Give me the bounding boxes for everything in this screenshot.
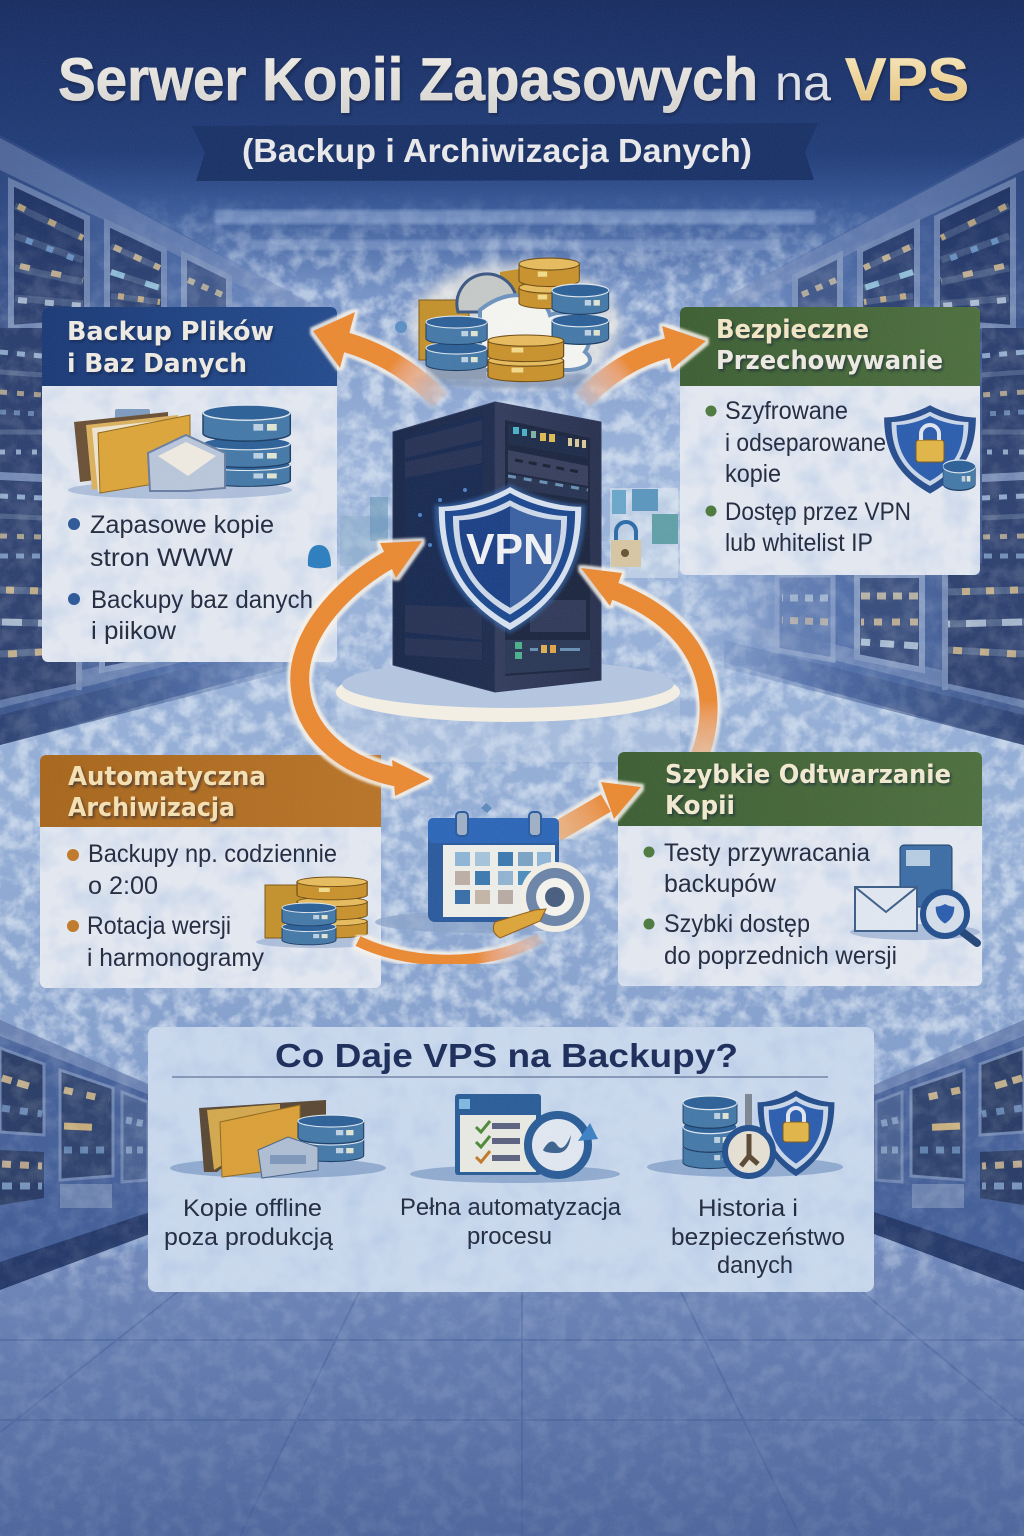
arrow: to backup panel xyxy=(313,312,440,400)
panel heading: automatic archiving: Automatyczna xyxy=(68,762,266,792)
text: full automation xyxy=(400,1194,621,1250)
bullets: secure storage: kopie xyxy=(725,460,781,488)
icon: small blue lock xyxy=(308,545,331,568)
panel heading: automatic archiving xyxy=(40,755,381,827)
title: Serwer Kopii Zapasowych xyxy=(58,46,758,113)
bullets: secure storage: lub whitelist IP xyxy=(725,529,873,557)
bullets: secure storage: Szyfrowane xyxy=(725,397,848,425)
panel: secure storage xyxy=(680,307,980,575)
text: offline copies: poza produkcją xyxy=(164,1224,333,1251)
icon: shield with lock xyxy=(884,405,976,494)
icon: restore tools xyxy=(850,845,980,943)
panel heading: backup: i Baz Danych xyxy=(67,349,247,379)
icon: checklist xyxy=(410,1094,620,1183)
panel: what VPS gives xyxy=(148,1027,874,1292)
vpn shield xyxy=(434,484,586,634)
title: VPS xyxy=(845,46,969,113)
bullets: fast restore: Testy przywracania xyxy=(664,839,870,867)
text: offline copies: Kopie offline xyxy=(183,1195,322,1222)
server rack xyxy=(393,402,601,692)
bullets: fast restore: backupów xyxy=(664,870,777,898)
bullets: automatic archiving xyxy=(67,840,337,972)
panel: backup xyxy=(42,307,337,662)
arrow: archive loop xyxy=(358,938,540,960)
bullets: automatic archiving: Backupy np. codziennie xyxy=(88,840,337,868)
right background icons xyxy=(610,488,678,578)
panel: fast restore xyxy=(618,752,982,986)
panel heading: backup xyxy=(42,307,337,386)
text: history and security: danych xyxy=(717,1252,793,1279)
subtitle ribbon xyxy=(192,123,818,181)
bullets: secure storage xyxy=(706,397,911,557)
bullets: automatic archiving: o 2:00 xyxy=(88,872,158,900)
panel heading: backup: Backup Plików xyxy=(67,317,274,347)
text: history and security: bezpieczeństwo xyxy=(671,1224,845,1251)
panel heading: secure storage xyxy=(680,307,980,386)
bullets: backup: Backupy baz danych xyxy=(91,586,313,614)
text: full automation: procesu xyxy=(467,1223,552,1250)
panel heading: automatic archiving: Archiwizacja xyxy=(68,793,235,823)
icon: folders and database xyxy=(68,405,292,499)
icon: database key shield xyxy=(647,1090,843,1177)
bullets: backup: stron WWW xyxy=(90,544,233,572)
subtitle ribbon: (Backup i Archiwizacja Danych) xyxy=(242,132,752,169)
text: history and security: Historia i xyxy=(698,1195,798,1222)
bullets: secure storage: Dostęp przez VPN xyxy=(725,498,911,526)
panel heading: fast restore: Kopii xyxy=(665,791,735,821)
bullets: fast restore: Szybki dostęp xyxy=(664,910,810,938)
text: full automation: Pełna automatyzacja xyxy=(400,1194,621,1221)
arrow: left loop xyxy=(300,541,430,796)
arrow: to secure storage panel xyxy=(583,326,706,400)
bullets: secure storage: i odseparowane xyxy=(725,429,886,457)
left background icons xyxy=(340,497,388,566)
bullets: automatic archiving: Rotacja wersji xyxy=(87,912,231,940)
panel heading: secure storage: Przechowywanie xyxy=(716,346,943,376)
bullets: automatic archiving: i harmonogramy xyxy=(87,944,264,972)
panel heading: secure storage: Bezpieczne xyxy=(716,315,869,345)
panel heading: fast restore xyxy=(618,752,982,826)
panel heading: fast restore: Szybkie Odtwarzanie xyxy=(665,760,951,790)
bullets: backup xyxy=(68,511,313,645)
panel heading: what VPS gives: Co Daje VPS na Backupy? xyxy=(275,1037,738,1074)
vpn shield: VPN xyxy=(466,525,554,574)
bullets: backup: i piikow xyxy=(91,617,177,645)
arrow: restore to shield xyxy=(581,568,709,755)
text: history and security xyxy=(671,1195,845,1279)
icon: calendar xyxy=(375,803,590,938)
bullets: fast restore xyxy=(644,839,897,970)
panel: automatic archiving xyxy=(40,755,381,988)
icon: archive stacks xyxy=(256,877,380,948)
platform under server xyxy=(336,660,680,762)
bullets: fast restore: do poprzednich wersji xyxy=(664,942,897,970)
icon: folders xyxy=(170,1100,386,1178)
title: na xyxy=(775,55,831,111)
text: offline copies xyxy=(164,1195,333,1251)
bullets: backup: Zapasowe kopie xyxy=(90,511,274,539)
icon: storage cluster xyxy=(395,258,620,388)
arrow: to fast restore xyxy=(556,782,641,832)
